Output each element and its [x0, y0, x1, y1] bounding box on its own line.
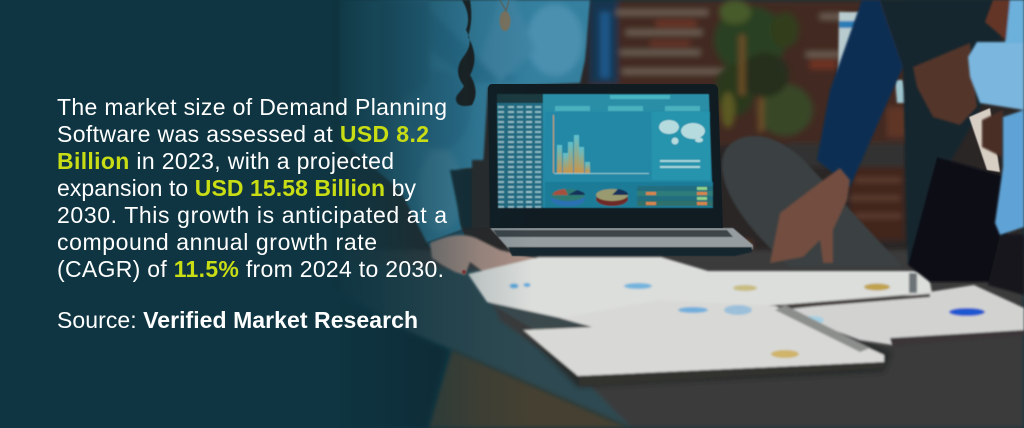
- table: [340, 250, 1024, 428]
- fingers on cup: [982, 110, 1003, 157]
- necklace pendant: [500, 0, 510, 31]
- plant foliage: [714, 0, 813, 136]
- line 5: 2030. This growth is anticipated at a: [57, 202, 447, 228]
- trousers of person on the left: [340, 300, 447, 428]
- floor: [428, 350, 630, 428]
- line 6: compound annual growth rate: [57, 229, 377, 255]
- tab headers: [555, 95, 700, 111]
- person on the left: blue shirt: [340, 0, 590, 248]
- dark vest and trousers: [880, 0, 1024, 295]
- laptop lid: [488, 84, 723, 228]
- paper shadow: [523, 312, 892, 387]
- right paper: [780, 285, 1024, 345]
- stats rows: [637, 186, 713, 206]
- laptop: [488, 84, 753, 256]
- striped blue shirt on the right: [968, 0, 1024, 235]
- paper clutter: spectacles, colour marks: [510, 273, 1024, 386]
- whiteboard behind the sleeve: [838, 12, 908, 103]
- bar chart: [545, 112, 651, 180]
- cup: [969, 108, 1000, 172]
- person on the right: navy sleeve: [817, 0, 903, 187]
- right hand on table: [770, 168, 850, 263]
- line 4: expansion to USD 15.58 Billion by: [57, 175, 416, 201]
- front paper: [523, 300, 884, 376]
- source line: Source: Verified Market Research: [57, 307, 418, 333]
- left hand on papers: [430, 235, 537, 275]
- red nails: [462, 260, 536, 274]
- line 1: The market size of Demand Planning: [57, 94, 447, 120]
- laptop screen dashboard: [497, 94, 713, 208]
- bracelet cuff: [427, 230, 465, 248]
- world map panel: [652, 112, 710, 180]
- curly hair strand: [456, 0, 476, 106]
- hand holding cup: [913, 43, 977, 125]
- dark gap below shirt: [450, 170, 472, 228]
- text block: market summary: [57, 94, 447, 333]
- data table column: [497, 94, 543, 208]
- line 7: (CAGR) of 11.5% from 2024 to 2030.: [57, 256, 444, 282]
- pie charts: [545, 182, 713, 208]
- shirt folds: [380, 0, 583, 232]
- scattered paper reports: [468, 257, 1024, 387]
- chair: [722, 136, 903, 267]
- back paper: [468, 257, 932, 325]
- back wall: brick: [330, 0, 1024, 290]
- shadow triangle on table: [487, 302, 593, 329]
- line 2: Software was assessed at USD 8.2: [57, 121, 429, 147]
- laptop base and keyboard: [490, 228, 753, 256]
- line 3: Billion in 2023, with a projected: [57, 148, 394, 174]
